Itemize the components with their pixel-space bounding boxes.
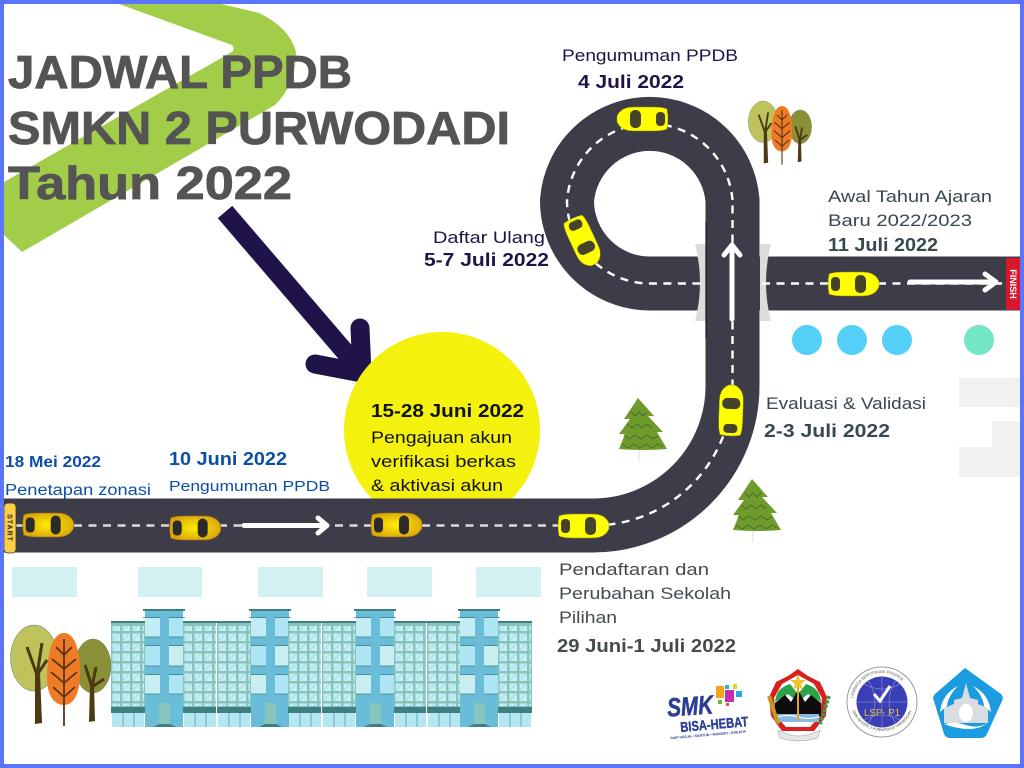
text: 15-28 Juni: Pengajuan akun <box>371 428 512 447</box>
bridge rail <box>705 222 707 338</box>
text: pengumuman 4 juli <box>562 46 738 92</box>
road: main route <box>4 124 1020 525</box>
highlight circle: pengajuan akun <box>344 332 540 528</box>
text: evaluasi: Evaluasi & Validasi <box>766 394 926 413</box>
road surface over crossing <box>4 198 732 526</box>
tree cluster small <box>748 101 812 165</box>
text: evaluasi: 2-3 Juli 2022 <box>764 421 890 441</box>
text: 18 Mei <box>5 454 151 499</box>
logo: LSP P1: LEMBAGA SERTIFIKASI PROFESI <box>850 670 904 698</box>
centre dashes: bend <box>593 200 732 526</box>
text: daftar ulang: Daftar Ulang <box>433 228 545 247</box>
logo: Jawa Tengah crest <box>769 669 829 741</box>
title: SMKN 2 PURWODADI <box>8 102 510 154</box>
text: pendaftaran <box>557 560 736 656</box>
text: pendaftaran: Pendaftaran dan <box>559 560 709 579</box>
pine tree right <box>733 479 781 543</box>
tree cluster large <box>10 625 111 726</box>
text: pendaftaran: Perubahan Sekolah <box>559 584 731 603</box>
text: 10 Juni <box>169 449 330 495</box>
start marker: START <box>6 514 12 542</box>
bridge sides <box>695 244 771 321</box>
text: 15-28 Juni: 15-28 Juni 2022 <box>371 401 524 421</box>
logo: SMK Bisa Hebat: BISA-HEBAT <box>680 713 749 735</box>
text: awal tahun ajaran: 11 Juli 2022 <box>828 235 938 255</box>
text: 18 Mei: Penetapan zonasi <box>5 482 151 499</box>
logo: SMK Bisa Hebat: SIAP KERJA • SANTUN • MANDIRI • KREATIF <box>670 730 747 740</box>
white direction arrows <box>244 245 996 533</box>
green swoosh <box>4 4 296 252</box>
text: awal tahun ajaran: Awal Tahun Ajaran <box>828 187 992 206</box>
text: pendaftaran: Pilihan <box>559 608 617 627</box>
text: awal tahun ajaran <box>828 187 992 255</box>
dots row <box>792 325 994 355</box>
text: 15-28 Juni <box>371 401 524 495</box>
cars <box>23 107 879 541</box>
text: awal tahun ajaran: Baru 2022/2023 <box>828 211 972 230</box>
text: 15-28 Juni: verifikasi berkas <box>371 452 516 471</box>
logo: SMK Bisa Hebat: SMK <box>666 689 716 723</box>
text: 15-28 Juni: & aktivasi akun <box>371 476 503 495</box>
text: 10 Juni: 10 Juni 2022 <box>169 449 287 469</box>
arrow: navy pointer to yellow circle <box>225 212 362 373</box>
logo: blue pentagon <box>933 668 1003 738</box>
finish marker: FINISH <box>1008 269 1018 299</box>
title <box>8 46 510 209</box>
logo: LSP P1: SMK NEGERI 2 PURWODADI GROBOGAN <box>852 710 912 731</box>
decorative grey blocks <box>959 378 1020 477</box>
text: 10 Juni: Pengumuman PPDB <box>169 478 330 495</box>
title: JADWAL PPDB <box>8 46 352 98</box>
finish marker <box>1006 258 1020 310</box>
road surface under crossing <box>567 124 1020 284</box>
text: pengumuman 4 juli: 4 Juli 2022 <box>578 72 684 92</box>
logo: SMK Bisa Hebat <box>666 684 749 740</box>
text: daftar ulang <box>424 228 549 270</box>
text: evaluasi <box>764 394 926 441</box>
centre dashes: loop <box>567 124 1005 283</box>
pine tree left <box>619 398 667 462</box>
logo: LSP P1 <box>846 666 918 738</box>
start marker <box>4 503 16 553</box>
title: Tahun 2022 <box>8 157 292 209</box>
light cyan blocks <box>12 567 541 597</box>
text: pengumuman 4 juli: Pengumuman PPDB <box>562 46 738 65</box>
centre dashes: straight start <box>16 524 593 527</box>
building row <box>111 609 532 727</box>
text: 18 Mei: 18 Mei 2022 <box>5 454 101 471</box>
text: pendaftaran: 29 Juni-1 Juli 2022 <box>557 636 736 656</box>
text: daftar ulang: 5-7 Juli 2022 <box>424 250 549 270</box>
logo: LSP P1: LSP- P1 <box>864 708 900 719</box>
